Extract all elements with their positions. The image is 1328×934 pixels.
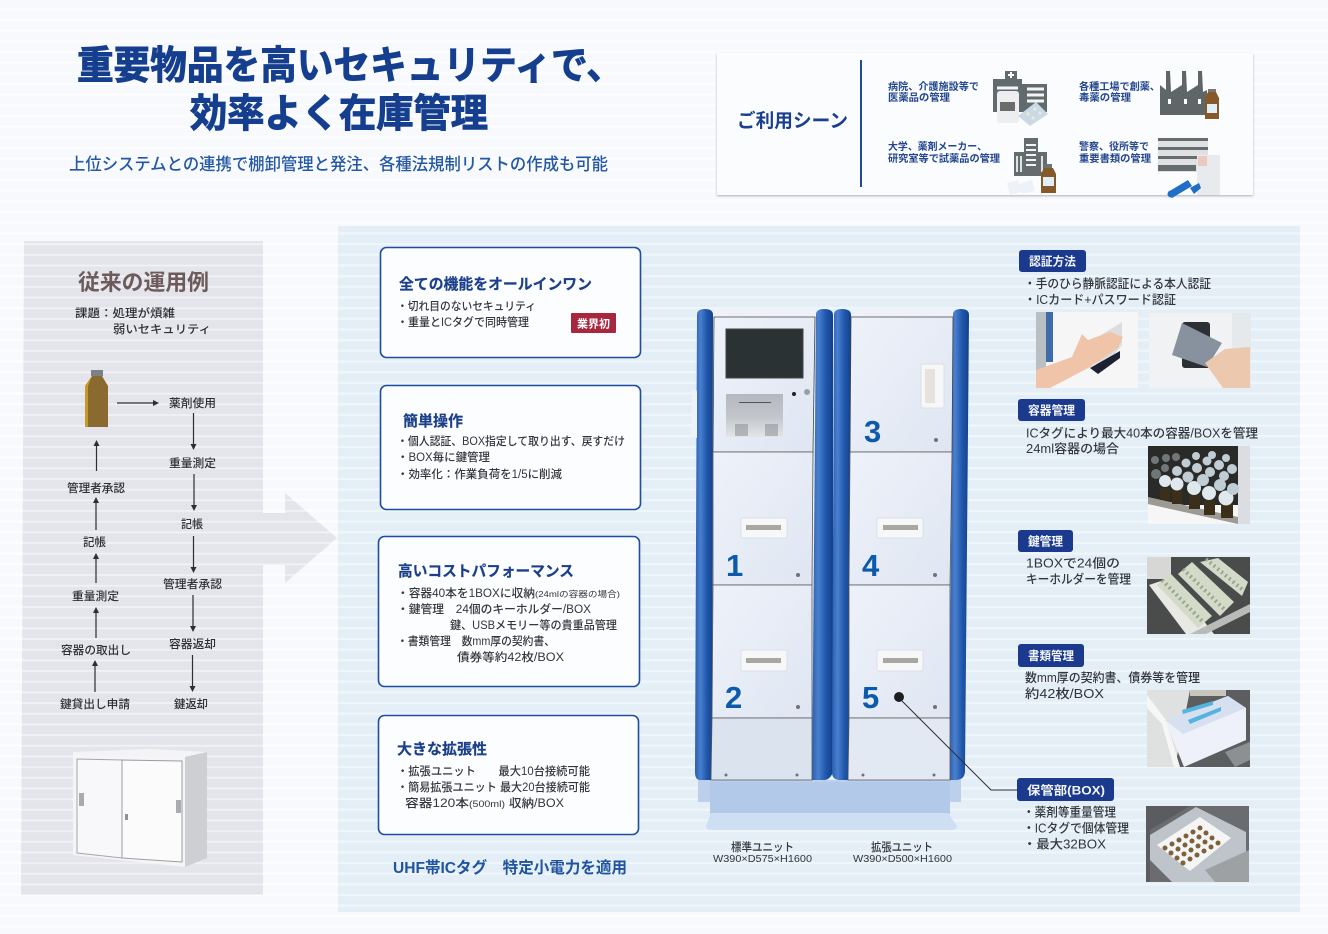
- text block: all in one details: [397, 300, 536, 329]
- illustration: sliding door cabinet: [73, 749, 207, 867]
- flowchart: conventional workflow: 容器の取出し: [61, 643, 131, 657]
- text block: cost performance details: [397, 586, 620, 664]
- base plate: [698, 780, 961, 830]
- text block: key management: 1BOXで24個の: [1026, 556, 1120, 570]
- text block: container management: ICタグにより最大40本の容器/BOXを管理: [1026, 426, 1258, 440]
- subtitle: 上位システムとの連携で棚卸管理と発注、各種法規制リストの作成も可能: [69, 155, 608, 174]
- text block: expandability details: ・簡易拡張ユニット 最大20台接続可能: [397, 780, 590, 794]
- text block: easy operation details: ・効率化：作業負荷を1/5に削減: [397, 467, 562, 481]
- text block: storage box: ・薬剤等重量管理: [1023, 804, 1116, 820]
- title: 重要物品を高いセキュリティで、: [77, 45, 623, 88]
- heading: conventional operation: 従来の運用例: [78, 270, 209, 295]
- illustration: locker cabinet units: [691, 309, 969, 865]
- flowchart: conventional workflow: 薬剤使用: [169, 396, 216, 410]
- text block: issues: [75, 306, 211, 336]
- BOX numbers: 4: [862, 548, 880, 583]
- photo: palm vein reader: [1036, 312, 1138, 388]
- BOX numbers: 3: [864, 414, 881, 449]
- unit label: standard unit: 標準ユニット: [731, 840, 794, 854]
- text block: expandability details: 容器120本: [405, 796, 470, 810]
- section: key management: [1018, 530, 1250, 634]
- text block: key management: [1026, 556, 1131, 586]
- text block: cost performance details: 債券等約42枚/BOX: [457, 650, 564, 664]
- BOX numbers: 1: [726, 548, 743, 583]
- flowchart: conventional workflow: 重量測定: [72, 589, 120, 603]
- flowchart: conventional workflow: 記帳: [181, 517, 203, 531]
- text block: issues: 課題：処理が煩雑: [75, 306, 176, 320]
- flowchart: conventional workflow: 管理者承認: [163, 577, 223, 591]
- text block: expandability details: (500ml): [469, 799, 505, 809]
- text block: all in one details: ・重量とICタグで同時管理: [397, 315, 529, 329]
- photo: rows of bottles: [1148, 446, 1250, 524]
- BOX numbers: [725, 414, 881, 715]
- text block: authentication: ・ICカード+パスワード認証: [1024, 293, 1176, 307]
- text block: cost performance details: ・鍵管理 24個のキーホルダー/BOX: [397, 602, 591, 616]
- panel: usage scenes: [717, 53, 1253, 198]
- text block: cost performance details: (24mlの容器の場合): [535, 589, 620, 599]
- heading: usage scenes: ご利用シーン: [737, 109, 848, 132]
- text block: storage box: [1023, 804, 1129, 852]
- scene: factory: [1079, 71, 1219, 119]
- text block: key management: キーホルダーを管理: [1026, 572, 1131, 586]
- icon: medicine bottle: [85, 370, 108, 427]
- blue posts: [695, 309, 969, 780]
- panel: features background: [338, 226, 1300, 912]
- scene: university laboratory: 研究室等で試薬品の管理: [888, 152, 1000, 165]
- text block: authentication: [1024, 276, 1211, 307]
- scene: hospital: 病院、介護施設等で: [888, 80, 979, 93]
- text block: document management: 約42枚/BOX: [1025, 686, 1105, 701]
- text block: cost performance details: ・書類管理 数mm厚の契約書、: [397, 634, 555, 648]
- scene: police and public office: 重要書類の管理: [1079, 152, 1151, 165]
- photo: storage tray: [1146, 806, 1249, 882]
- label: document management: 書類管理: [1028, 648, 1074, 663]
- label: authentication method: [1019, 250, 1086, 272]
- heading: cost performance: 高いコストパフォーマンス: [398, 563, 574, 580]
- text block: expandability details: 収納/BOX: [509, 796, 564, 810]
- text block: all in one details: ・切れ目のないセキュリティ: [397, 300, 536, 313]
- flowchart: conventional workflow: [60, 396, 223, 711]
- BOX numbers: 2: [725, 680, 742, 715]
- text block: container management: 24ml容器の場合: [1026, 441, 1120, 456]
- flowchart: conventional workflow: 容器返却: [169, 637, 216, 651]
- section: storage box: [1017, 778, 1249, 882]
- door handles: [741, 364, 944, 671]
- scene: university laboratory: 大学、薬剤メーカー、: [888, 140, 987, 153]
- text block: issues: 弱いセキュリティ: [113, 323, 211, 336]
- title: [77, 45, 623, 136]
- flowchart: conventional workflow: 記帳: [83, 535, 106, 549]
- flowchart: conventional workflow: 鍵返却: [174, 697, 208, 711]
- section: container management: [1018, 399, 1258, 524]
- text block: document management: [1025, 670, 1200, 701]
- scene: factory: 各種工場で創薬、: [1079, 80, 1160, 93]
- text block: authentication: ・手のひら静脈認証による本人認証: [1024, 276, 1211, 291]
- scene: factory: 毒薬の管理: [1079, 91, 1131, 104]
- heading: expandability: 大きな拡張性: [397, 740, 487, 758]
- panel: expandability: [378, 716, 638, 834]
- photo: key holders: [1147, 557, 1250, 634]
- unit label: standard unit: W390×D575×H1600: [713, 854, 812, 865]
- text block: cost performance details: 鍵、USBメモリー等の貴重品管理: [450, 618, 617, 632]
- badge: industry first: [571, 313, 616, 333]
- panel: cost performance: [378, 536, 640, 686]
- scene: hospital: 医薬品の管理: [888, 91, 950, 104]
- flowchart: conventional workflow: 重量測定: [169, 456, 217, 470]
- scene: hospital: [888, 71, 1048, 126]
- badge: industry first: 業界初: [577, 316, 610, 330]
- flowchart: conventional workflow: 管理者承認: [67, 481, 126, 495]
- BOX numbers: 5: [862, 680, 879, 715]
- label: key management: [1018, 530, 1073, 552]
- scene: university laboratory: [888, 138, 1056, 195]
- callout leader line: [894, 692, 1018, 790]
- text block: easy operation details: ・BOX毎に鍵管理: [397, 450, 490, 464]
- scene: police and public office: [1079, 138, 1220, 198]
- text block: document management: 数mm厚の契約書、債券等を管理: [1025, 670, 1200, 685]
- text block: cost performance details: ・容器40本を1BOXに収納: [397, 586, 535, 600]
- touch screen: [726, 329, 803, 378]
- photo: IC card: [1149, 313, 1251, 388]
- note: UHF band IC tag: UHF帯ICタグ 特定小電力を適用: [393, 858, 627, 877]
- text block: easy operation details: [397, 434, 625, 481]
- section: authentication: [1019, 250, 1251, 388]
- label: container management: [1018, 399, 1085, 421]
- label: storage box: 保管部(BOX): [1027, 782, 1105, 798]
- panel: easy operation: [380, 386, 640, 510]
- unit label: expansion unit: 拡張ユニット: [871, 840, 933, 854]
- text block: storage box: ・ICタグで個体管理: [1023, 820, 1129, 836]
- screws: [724, 438, 938, 776]
- panel: conventional operation example: [21, 241, 337, 895]
- text block: expandability details: [397, 764, 590, 810]
- text block: container management: [1026, 426, 1258, 456]
- palm vein reader plate: [726, 389, 810, 437]
- text block: easy operation details: ・個人認証、BOX指定して取り出す、戻すだけ: [397, 434, 625, 448]
- title: 効率よく在庫管理: [190, 93, 488, 136]
- scene: police and public office: 警察、役所等で: [1079, 140, 1149, 153]
- panel: all in one: [380, 248, 640, 358]
- unit label: expansion unit: W390×D500×H1600: [853, 854, 952, 865]
- photo: file folders: [1147, 690, 1250, 767]
- flowchart: conventional workflow: 鍵貸出し申請: [60, 697, 131, 711]
- label: document management: [1018, 644, 1084, 667]
- text block: expandability details: ・拡張ユニット 最大10台接続可能: [397, 764, 590, 778]
- section: document management: [1018, 644, 1250, 767]
- label: container management: 容器管理: [1028, 402, 1075, 418]
- unit label: standard unit: [713, 840, 812, 865]
- label: authentication method: 認証方法: [1029, 254, 1076, 268]
- heading: easy operation: 簡単操作: [403, 412, 463, 430]
- unit label: expansion unit: [853, 840, 952, 865]
- text block: storage box: ・最大32BOX: [1023, 838, 1107, 852]
- label: key management: 鍵管理: [1028, 534, 1063, 548]
- cabinet doors: [691, 309, 953, 780]
- heading: all in one: 全ての機能をオールインワン: [399, 275, 592, 293]
- label: storage box: [1017, 778, 1114, 801]
